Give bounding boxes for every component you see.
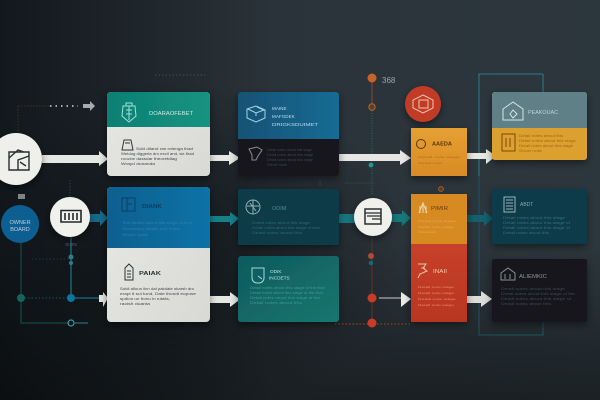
body text: Detail <box>418 230 437 234</box>
icon: plant <box>249 147 262 160</box>
body text: Detail notes about this <box>503 231 549 235</box>
circle: blue label: OWNER <box>9 220 31 226</box>
body text: Detail note <box>418 161 443 165</box>
body text <box>418 219 457 234</box>
faint body text: Short note <box>122 233 148 237</box>
body text: Short note <box>267 163 287 167</box>
arrow: teal card to centre circle <box>339 214 355 223</box>
arrow: middle card to orange card <box>339 150 411 165</box>
faint body text: Text details about this stage of flow <box>122 221 193 225</box>
icon: house <box>503 102 523 120</box>
heading: ALIEMKIC <box>519 274 547 280</box>
arrow: red card to dark card <box>467 291 492 307</box>
panel: card 2 blue and white <box>107 187 210 322</box>
connector lines: centre and right network <box>320 74 543 335</box>
icon: brain <box>246 200 260 214</box>
circle: centre white with layout icon <box>354 198 392 236</box>
heading: DOARAOFEBET <box>149 111 194 117</box>
arrow: orange card to right card <box>467 149 496 164</box>
arrow: circle to card 1 <box>42 151 108 166</box>
heading: PAIAK <box>139 271 162 277</box>
icon: open box <box>247 106 265 122</box>
body text: Detail notes about this stage of <box>503 226 570 230</box>
heading <box>272 106 318 127</box>
body text: Detail note stage <box>418 297 457 301</box>
faint body text: Detail notes about this stage of the flow <box>250 286 326 290</box>
icon: folder map <box>9 150 29 170</box>
icon: house <box>501 268 515 280</box>
body text <box>418 285 457 307</box>
body text: Detail notes about this stage <box>501 287 565 291</box>
body text: Detail notes about this stage <box>503 216 565 220</box>
faint body text: Detail notes about this stage <box>252 221 310 225</box>
body text: Detail notes about this <box>501 302 552 306</box>
body text: spdion un fronu in rutalis, <box>120 297 170 301</box>
circle: white with building icon <box>50 197 90 237</box>
icon: tag <box>125 264 133 280</box>
body text: Detail notes about this stage <box>267 153 313 157</box>
body text <box>120 287 196 306</box>
arrow: card 1 to middle card <box>210 151 240 165</box>
body text: Detail notes about this stage <box>519 139 576 143</box>
arrow: blue card to teal card <box>210 212 239 226</box>
body text <box>418 155 461 165</box>
body text: Sold diland ran rutenga thad <box>136 147 193 151</box>
faint body text: Secondary details and notes <box>122 227 180 231</box>
icon: book <box>502 134 515 151</box>
value label: 368 <box>382 76 396 85</box>
icon: layout <box>365 209 381 224</box>
panel: right card 3 black <box>492 259 587 322</box>
body text <box>267 148 313 167</box>
circle: red hexagon badge <box>405 86 441 122</box>
body text <box>519 134 576 153</box>
caption under white circle: ICON <box>65 242 77 247</box>
faint body text: Detail notes about this stage of the flow <box>250 291 324 295</box>
heading: ODIK <box>270 269 282 274</box>
panel: right card 1 grey and orange <box>492 92 587 160</box>
heading: ABDT <box>520 202 533 208</box>
body text: Detail note stage <box>418 219 457 223</box>
body text: Short note <box>519 149 542 153</box>
heading: ODIM <box>272 206 287 212</box>
icon: document <box>122 140 133 150</box>
panel: orange card 1 <box>411 128 467 176</box>
body text: rooche dassdar theoretdiag <box>121 157 177 161</box>
connector lines: left network <box>18 75 205 323</box>
icon: columns <box>61 210 81 222</box>
body text: racish duanla <box>120 302 150 306</box>
icon: scroll <box>418 264 427 278</box>
arrow: node to red card <box>401 292 411 307</box>
body text: Detail notes about this stage <box>519 144 573 148</box>
body text: Soldi alloun ilnn dal pakdale okarsh dro <box>120 287 194 291</box>
body text: Detail notes about this stage of <box>503 221 570 225</box>
icon: cup <box>252 268 264 283</box>
panel: right card 2 dark teal <box>492 189 587 244</box>
small label under main circle <box>18 194 25 199</box>
arrow: network to white card <box>99 292 108 307</box>
body text <box>121 147 194 166</box>
icon: shield <box>122 103 136 122</box>
heading: DIANK <box>142 204 162 210</box>
body text <box>501 287 575 306</box>
body text: Wrayd dunanda <box>121 162 155 166</box>
body text: Detail notes about this stage of <box>501 297 571 301</box>
icon: blue square <box>122 198 135 211</box>
arrow: white card to teal card <box>210 292 240 307</box>
icon: document <box>504 197 515 212</box>
heading <box>269 269 290 280</box>
icon: hexagon <box>413 95 433 113</box>
heading: MAINE <box>272 106 287 111</box>
heading: PEAKOUAC <box>528 110 558 116</box>
faint body text: Detail notes about this stage of the <box>250 296 320 300</box>
faint body text <box>252 221 321 235</box>
icon: globe <box>416 140 426 148</box>
body text: erapi it sul tund, Dale thondi eopuse <box>120 292 196 296</box>
body text: Detail note stage <box>418 225 455 229</box>
heading: MAFGDEK <box>272 114 296 119</box>
faint body text <box>122 221 193 237</box>
circle: blue label <box>1 205 39 243</box>
faint body text <box>250 286 326 305</box>
body text: Detail notes about this <box>519 134 563 138</box>
panel: middle card 2 dark teal <box>238 189 339 245</box>
body text: Weldog diggeria dro excil and, six thad <box>121 152 194 156</box>
circle: blue label: BOARD <box>10 227 30 233</box>
icon: columns <box>419 203 427 213</box>
arrow: orange card to dark teal card <box>467 211 493 226</box>
faint body text: Detail notes about this stage of flow <box>252 226 321 230</box>
heading: INCDETS <box>269 276 290 280</box>
heading: AAEDA <box>432 142 452 148</box>
panel: middle card 3 teal <box>238 256 339 322</box>
arrow: dotted grey lead-in <box>83 101 95 111</box>
body text: Detail notes about this stage <box>267 158 313 162</box>
panel: orange and red stacked card <box>411 194 467 322</box>
body text: Detail note stage <box>418 285 455 289</box>
heading: DRIGKSDUIMET <box>272 122 318 127</box>
body text: Detail note stage <box>418 155 461 159</box>
body text: Detail notes about this stage of the <box>501 292 575 296</box>
arrow: small circle to blue card <box>88 210 108 226</box>
connector nodes <box>17 74 443 328</box>
arrow: centre circle to orange card <box>390 210 411 226</box>
panel: card 1 teal and white <box>107 92 210 176</box>
heading: INAII <box>433 269 447 275</box>
body text: Detail notes about this stage <box>267 148 312 152</box>
heading: PIMIR <box>431 206 448 212</box>
faint body text: Detail notes about this <box>252 231 303 235</box>
circle: main white with icon <box>0 133 42 185</box>
faint body text: Detail notes about this <box>250 301 303 305</box>
body text <box>503 216 570 235</box>
body text: Detail note stage <box>418 291 455 295</box>
panel: middle card 1 blue and black <box>238 92 339 176</box>
body text: Detail note stage <box>418 303 455 307</box>
